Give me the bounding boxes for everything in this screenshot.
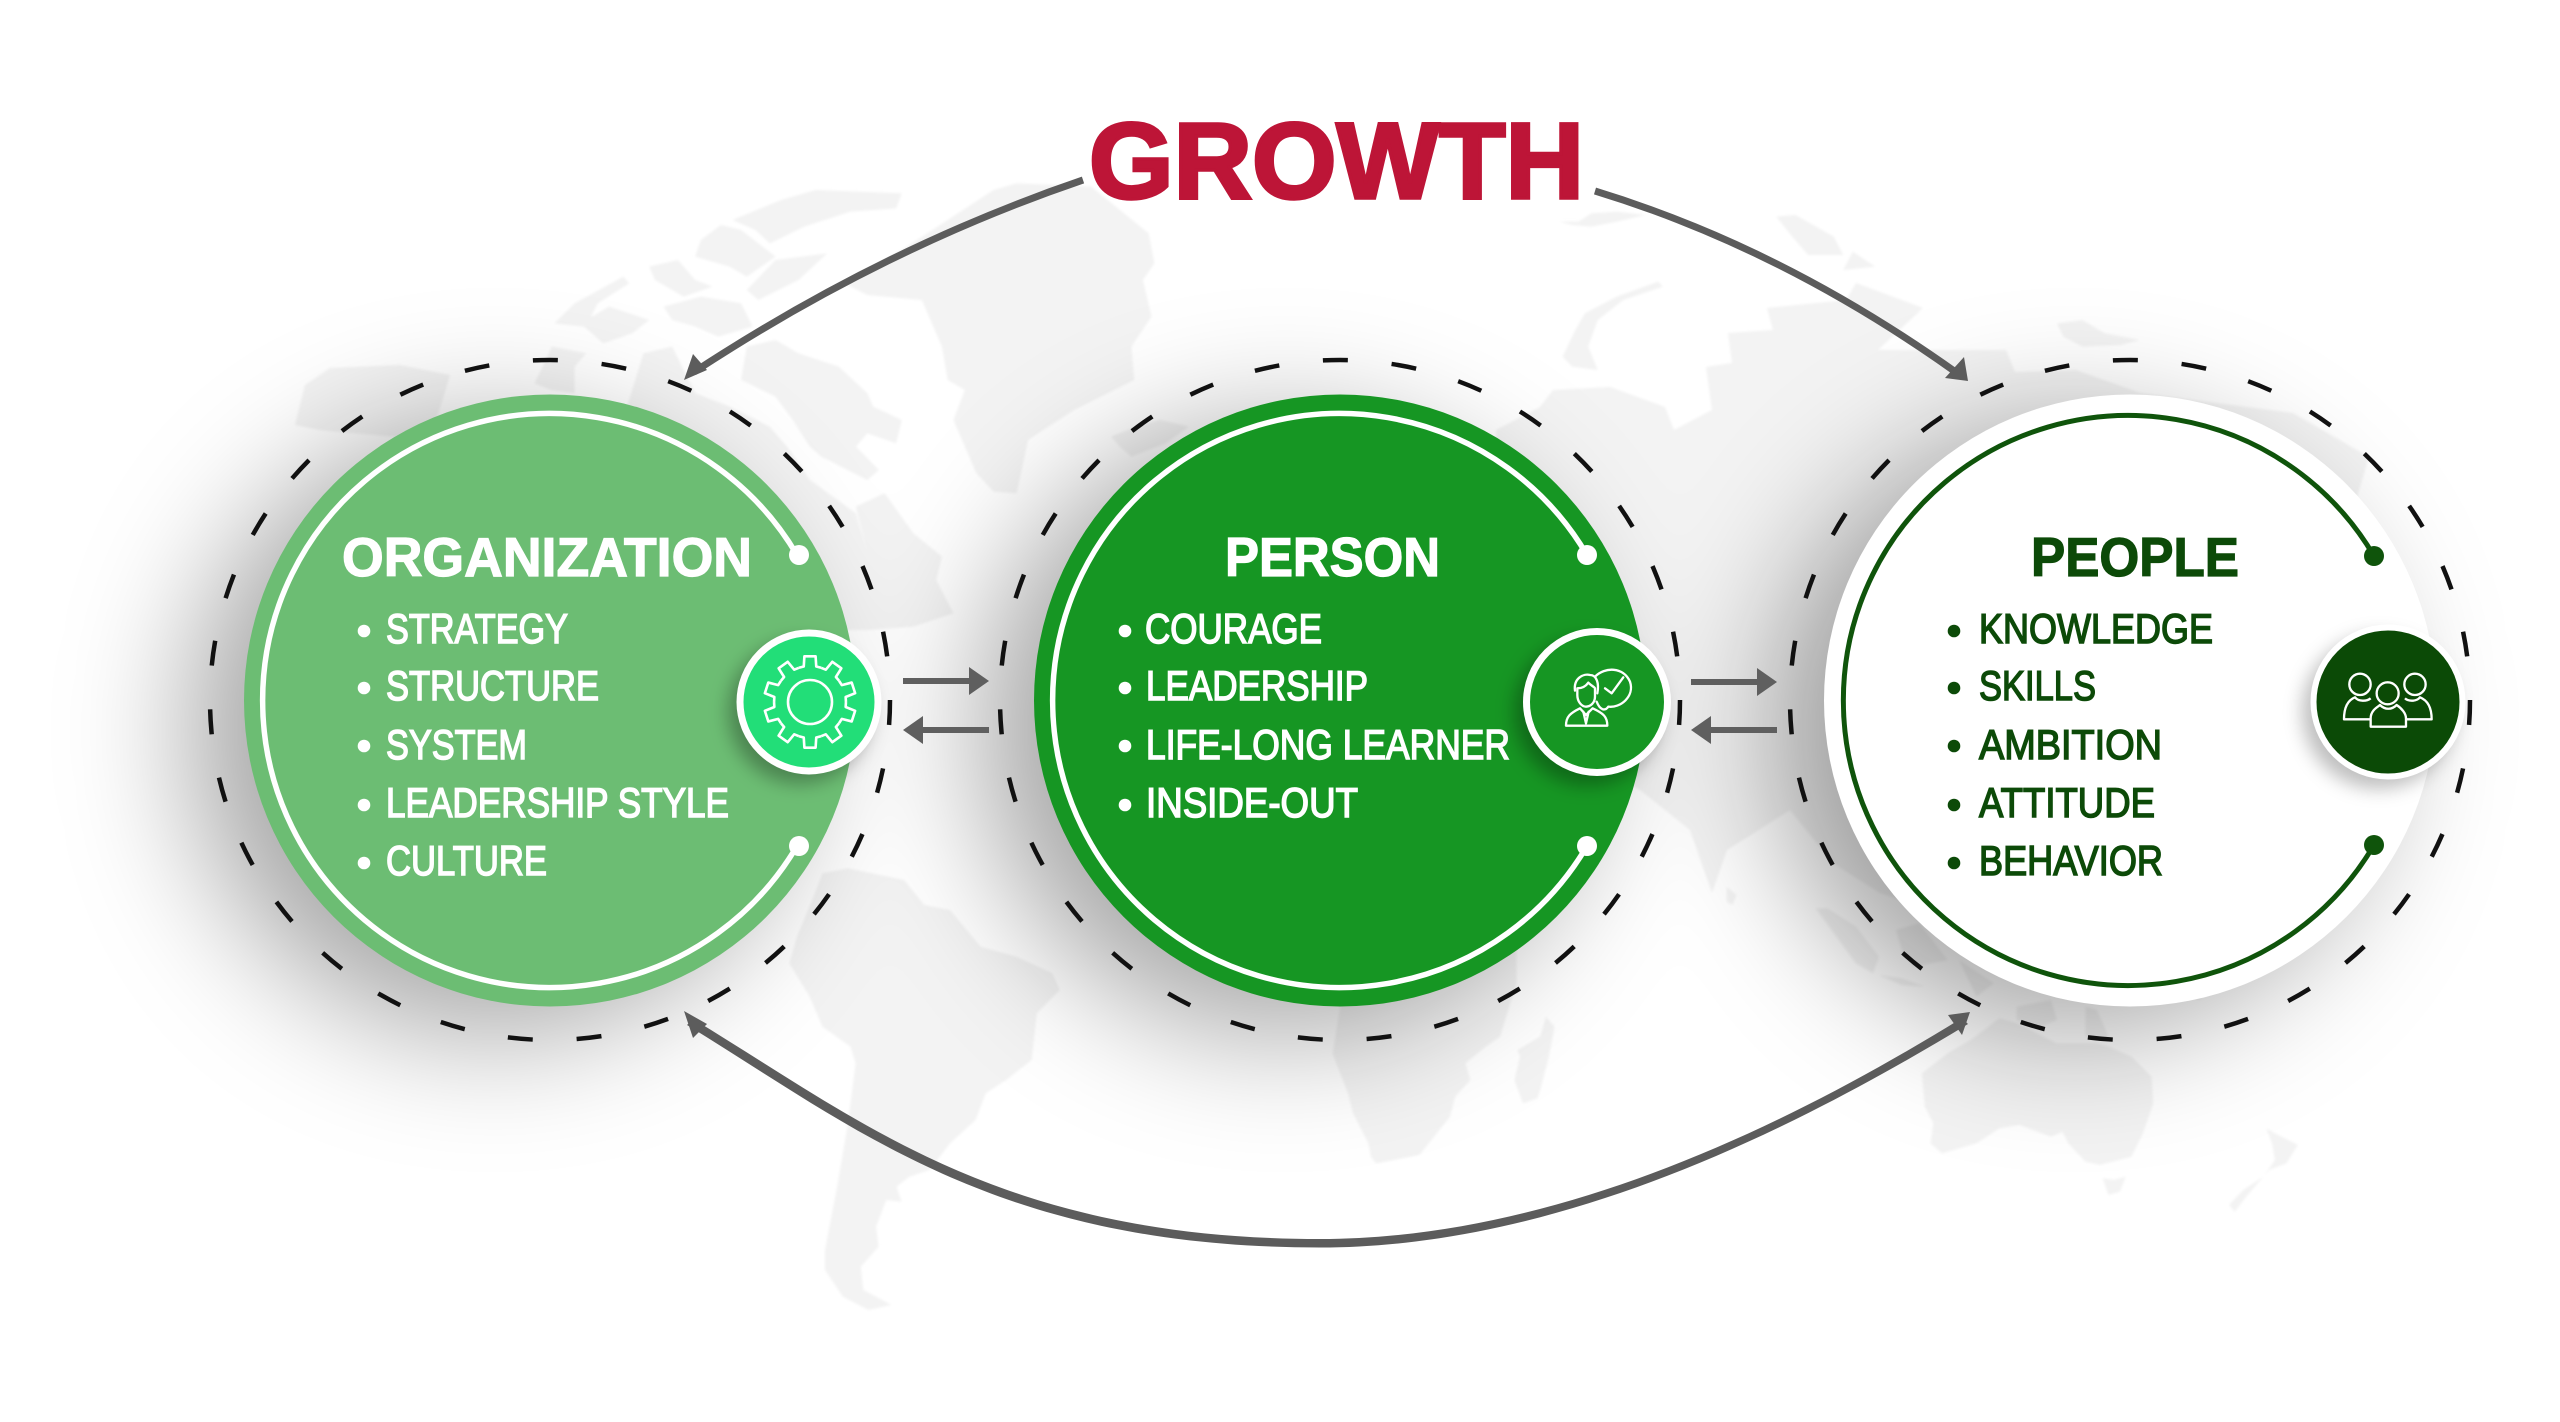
organization heading: ORGANIZATION [342,526,752,588]
soft circle shadows [190,425,2380,1035]
people list: KNOWLEDGE [1979,605,2213,652]
people ring [1843,415,2374,986]
person list: COURAGE [1145,605,1322,652]
curved arrow: growth to organization [684,180,1083,380]
icon: person with check bubble [1514,632,1668,786]
dashed orbit: person [1000,360,1680,1040]
organization ring [263,413,797,988]
panel: organization [244,394,856,1006]
people list: ATTITUDE [1979,779,2155,826]
organization disc [244,394,856,1006]
organization list: STRUCTURE [386,662,599,709]
organization list: SYSTEM [386,721,527,768]
world map watermark [295,183,2369,1310]
organization list [358,605,729,884]
person disc [1034,394,1646,1006]
people list: SKILLS [1979,662,2096,709]
organization list: STRATEGY [386,605,568,652]
icon: gear [728,633,878,784]
person list: INSIDE-OUT [1146,779,1358,826]
people heading: PEOPLE [2031,526,2239,588]
organization list: LEADERSHIP STYLE [386,779,729,826]
person list: LEADERSHIP [1146,662,1368,709]
person heading: PERSON [1225,526,1440,588]
title: GROWTH [1089,100,1584,221]
curved arrow: growth to people [1595,191,1968,381]
people list [1948,605,2213,884]
people list: AMBITION [1979,721,2162,768]
person ring [1053,413,1587,988]
organization list: CULTURE [386,837,547,884]
ring end dots [2364,546,2384,855]
ring end dots [1577,545,1597,856]
arrows: person and people exchange [1691,668,1777,744]
person list [1119,605,1510,826]
people disc [1824,394,2436,1006]
person list: LIFE-LONG LEARNER [1146,721,1510,768]
dashed orbit: people [1790,360,2470,1040]
curved double arrow: organization to people [684,1011,1970,1248]
people list: BEHAVIOR [1979,837,2163,884]
arrows: organization and person exchange [903,667,989,744]
panel: people [1824,394,2436,1006]
dashed orbit: organization [210,360,890,1040]
ring end dots [789,545,809,856]
panel: person [1034,394,1646,1006]
icon: team of three [2302,628,2462,789]
